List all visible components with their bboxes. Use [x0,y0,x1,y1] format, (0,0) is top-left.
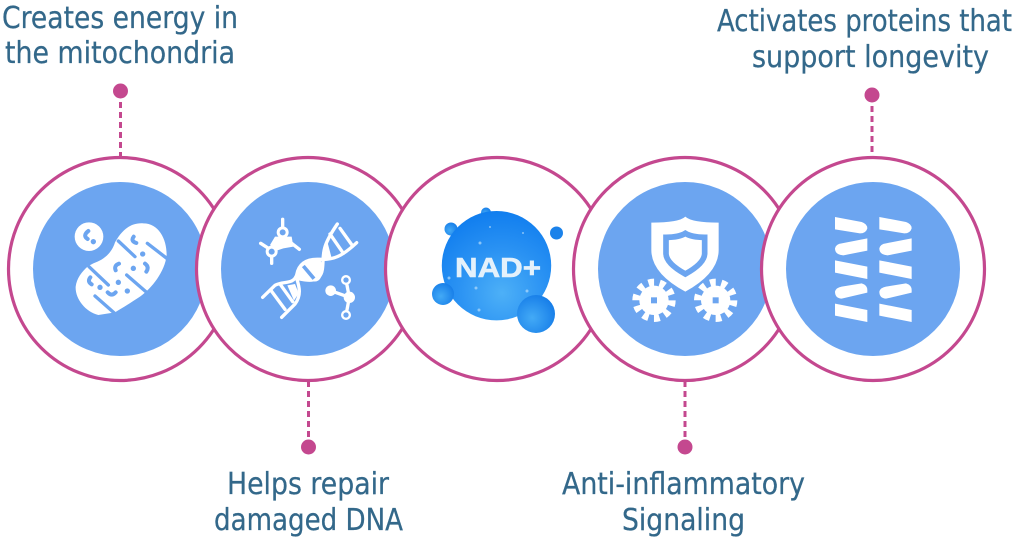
connector: anti-inflammatory dotted line [678,381,692,454]
label: creates energy: Creates energy in [2,1,238,36]
icon: mitochondrion [75,222,168,315]
label: activates proteins [717,4,1012,75]
label: creates energy: the mitochondria [5,36,235,71]
circle: NAD+ [386,158,608,380]
label: helps repair: Helps repair [227,467,390,502]
icon: DNA and molecules [261,219,357,320]
item: central NAD+ [386,158,608,380]
label: anti-inflammatory: Anti-inflammatory [562,467,805,502]
circle: anti-inflammatory [574,158,796,380]
icon: NAD+ molecule [432,208,563,333]
circle: proteins [762,158,984,380]
connector: mitochondria dotted line [113,84,128,158]
circle: mitochondria [8,158,232,380]
text: NAD+: NAD+ [455,252,541,283]
connector: proteins dotted line [864,88,880,153]
item: creates energy in the mitochondria [2,1,238,380]
label: anti-inflammatory: Signaling [622,503,745,538]
icon: shield and gears [636,217,734,318]
item: anti-inflammatory signaling [562,158,805,538]
item: activates proteins [717,4,1012,380]
label: helps repair [214,467,403,538]
label: activates proteins: support longevity [752,40,989,75]
icon: protein strips [835,217,912,322]
label: anti-inflammatory [562,467,805,538]
label: creates energy [2,1,238,71]
item: helps repair damaged DNA [196,158,420,538]
label: helps repair: damaged DNA [214,503,403,538]
connector: DNA dotted line [301,381,316,454]
circle: DNA repair [196,158,420,380]
